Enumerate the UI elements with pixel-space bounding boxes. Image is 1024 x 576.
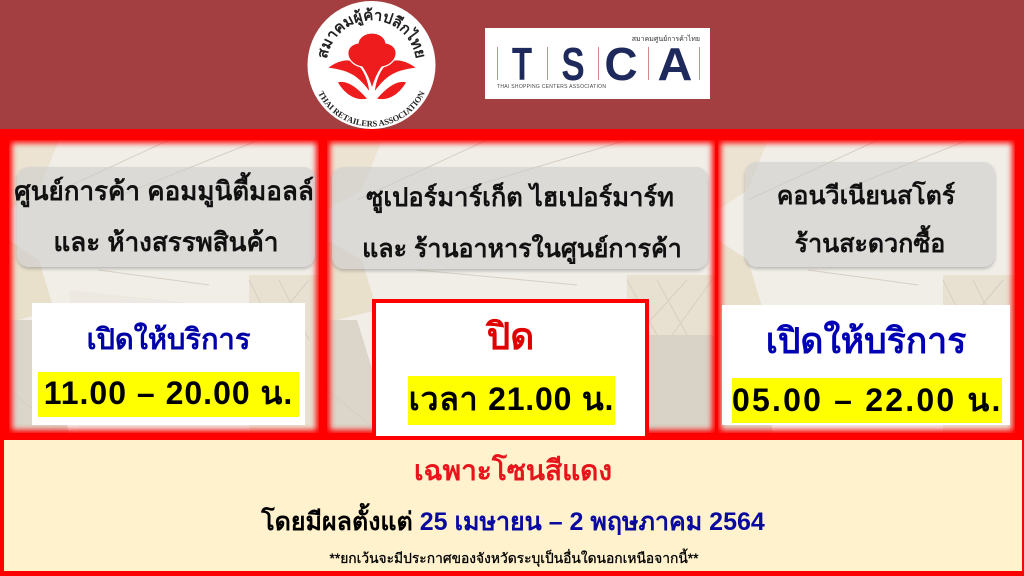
panel: convenience stores xyxy=(718,140,1015,433)
status heading: เปิดให้บริการ xyxy=(766,321,966,361)
category label: supermarkets xyxy=(332,167,708,269)
edge glow xyxy=(9,140,319,433)
status heading: เปิดให้บริการ xyxy=(87,324,250,356)
logo letters: A xyxy=(658,38,692,90)
effective dates: โดยมีผลตั้งแต่ 25 เมษายน – 2 พฤษภาคม 2564 xyxy=(261,508,765,536)
hours box: malls xyxy=(32,303,305,425)
logo: Thai Retailers Association: สมาคมผู้ค้าปลีกไทย xyxy=(319,7,424,58)
logo: Thai Retailers Association: THAI RETAILERS ASSOCIATION xyxy=(318,90,425,127)
footer heading: เฉพาะโซนสีแดง xyxy=(414,455,612,486)
logo letters: S xyxy=(561,38,585,90)
category label: convenience xyxy=(745,162,995,267)
label line 1: ศูนย์การค้า คอมมูนิตี้มอลล์ xyxy=(14,176,314,206)
edge glow xyxy=(718,140,1015,433)
hours highlight: 05.00 – 22.00 น. xyxy=(732,382,1003,418)
label line 1: คอนวีเนียนสโตร์ xyxy=(777,182,955,210)
logo letters: T xyxy=(512,38,532,90)
hours box: convenience xyxy=(722,305,1010,425)
label line 2: และ ร้านอาหารในศูนย์การค้า xyxy=(362,235,682,263)
logo Thai caption: สมาคมศูนย์การค้าไทย xyxy=(632,36,700,43)
closing time highlight: เวลา 21.00 น. xyxy=(409,381,614,417)
logo English caption: THAI SHOPPING CENTERS ASSOCIATION xyxy=(497,84,606,90)
panel: shopping malls xyxy=(9,140,319,433)
category label: malls xyxy=(17,167,315,267)
label line 2: และ ห้างสรรพสินค้า xyxy=(54,227,278,257)
panel: supermarkets xyxy=(327,140,715,433)
header band xyxy=(0,0,1024,129)
flower emblem xyxy=(327,33,417,100)
edge glow xyxy=(327,140,715,433)
hours highlight: 11.00 – 20.00 น. xyxy=(44,375,293,411)
label line 2: ร้านสะดวกซื้อ xyxy=(795,230,945,258)
hours box: supermarkets closed xyxy=(372,299,649,436)
label line 1: ซูเปอร์มาร์เก็ต ไฮเปอร์มาร์ท xyxy=(366,184,674,212)
footnote: **ยกเว้นจะมีประกาศของจังหวัดระบุเป็นอื่นใดนอกเหนือจากนี้** xyxy=(329,551,699,566)
logo: TSCA xyxy=(485,28,710,99)
footer panel xyxy=(4,440,1022,571)
logo letters xyxy=(497,38,700,90)
logo letters: C xyxy=(604,38,638,90)
logo: Thai Retailers Association xyxy=(308,1,436,129)
status heading: ปิด xyxy=(487,316,534,357)
